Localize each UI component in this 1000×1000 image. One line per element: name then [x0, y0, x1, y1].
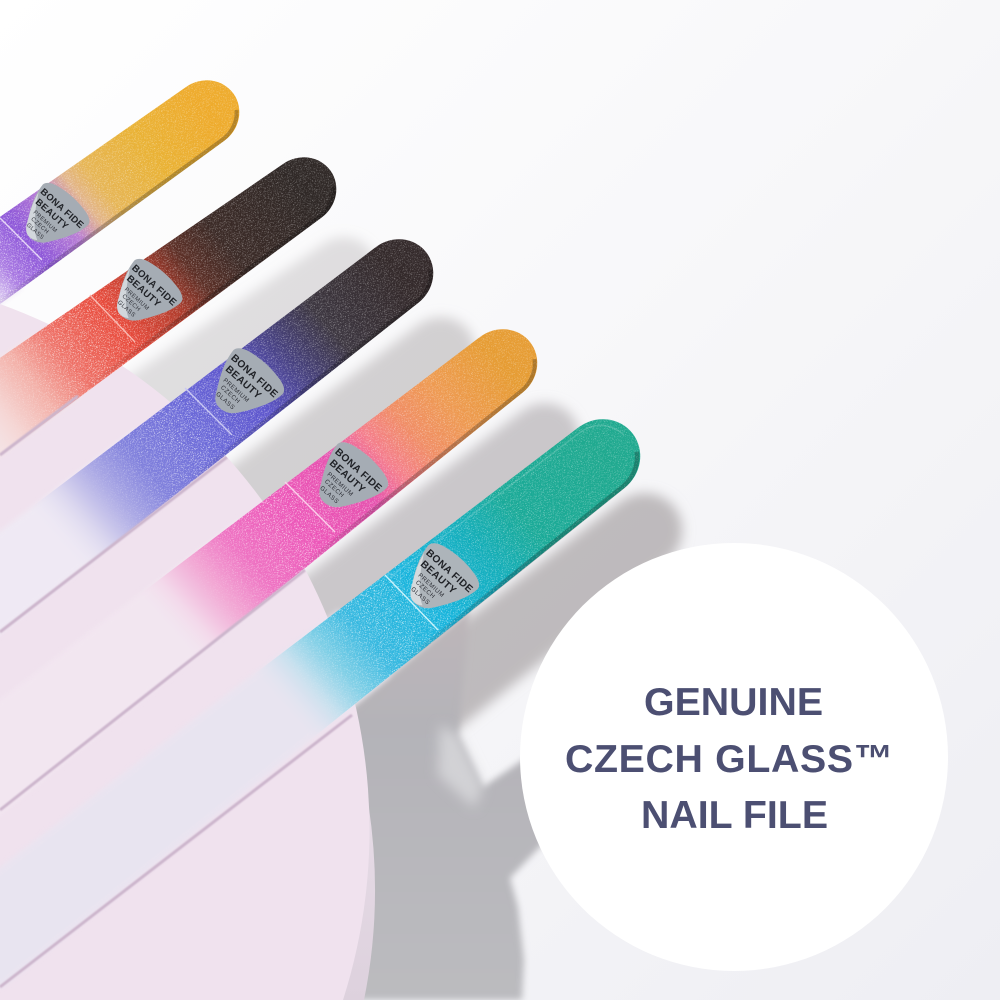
nail file: teal to cyan: [0, 396, 662, 988]
label: Bona Fide Beauty pick: PREMIUM: [221, 377, 250, 404]
nail file: black to blue: [0, 220, 451, 644]
nail file: yellow to purple: [0, 64, 254, 318]
label: Bona Fide Beauty pick: BEAUTY: [223, 364, 263, 402]
label: Bona Fide Beauty pick: [11, 177, 95, 261]
label: Bona Fide Beauty pick: PREMIUM: [32, 210, 58, 234]
label: Bona Fide Beauty pick: CZECH: [29, 216, 50, 236]
label: Bona Fide Beauty pick: BEAUTY: [124, 273, 163, 310]
label: Bona Fide Beauty pick: BEAUTY: [327, 458, 367, 496]
white circle callout: [520, 543, 948, 971]
label: Bona Fide Beauty pick: BONA FIDE: [423, 548, 475, 595]
label: Bona Fide Beauty pick: [302, 435, 394, 527]
label: Bona Fide Beauty pick: CZECH: [120, 294, 141, 313]
label: Bona Fide Beauty pick: PREMIUM: [123, 287, 150, 312]
heading text: CZECH GLASS™: [565, 737, 893, 781]
label: Bona Fide Beauty pick: BONA FIDE: [129, 263, 179, 309]
heading text: GENUINE: [644, 680, 823, 724]
nail file: black to red: [0, 137, 354, 468]
disc cast shadow: [340, 610, 585, 1000]
label: Bona Fide Beauty pick: CZECH: [219, 384, 241, 405]
label: Bona Fide Beauty pick: BONA FIDE: [39, 186, 86, 230]
heading text: [565, 680, 893, 837]
label: Bona Fide Beauty pick: GLASS: [214, 391, 236, 411]
label: Bona Fide Beauty pick: CZECH: [414, 579, 436, 600]
file shadows on background: [34, 218, 701, 824]
disc side edge: [300, 700, 375, 1000]
label: Bona Fide Beauty pick: CZECH: [323, 478, 345, 499]
label: Bona Fide Beauty pick: [101, 252, 188, 339]
label: Bona Fide Beauty pick: BEAUTY: [418, 559, 458, 597]
nail file: orange to pink: [0, 306, 558, 832]
label: Bona Fide Beauty pick: GLASS: [318, 485, 340, 505]
label: Bona Fide Beauty pick: GLASS: [25, 222, 45, 241]
label: Bona Fide Beauty pick: PREMIUM: [325, 471, 354, 498]
label: Bona Fide Beauty pick: [198, 341, 290, 433]
label: Bona Fide Beauty pick: GLASS: [116, 300, 136, 319]
label: Bona Fide Beauty pick: [393, 536, 485, 628]
label: Bona Fide Beauty pick: BEAUTY: [34, 197, 71, 232]
groove shadow lines on disc: [0, 396, 352, 987]
label: Bona Fide Beauty pick: PREMIUM: [416, 572, 445, 599]
label: Bona Fide Beauty pick: GLASS: [409, 586, 431, 606]
label: Bona Fide Beauty pick: BONA FIDE: [228, 353, 280, 400]
heading text: NAIL FILE: [641, 793, 828, 837]
penumbra beside light patch: [438, 725, 483, 808]
label: Bona Fide Beauty pick: BONA FIDE: [332, 447, 384, 494]
pink display disc: [0, 304, 370, 1000]
